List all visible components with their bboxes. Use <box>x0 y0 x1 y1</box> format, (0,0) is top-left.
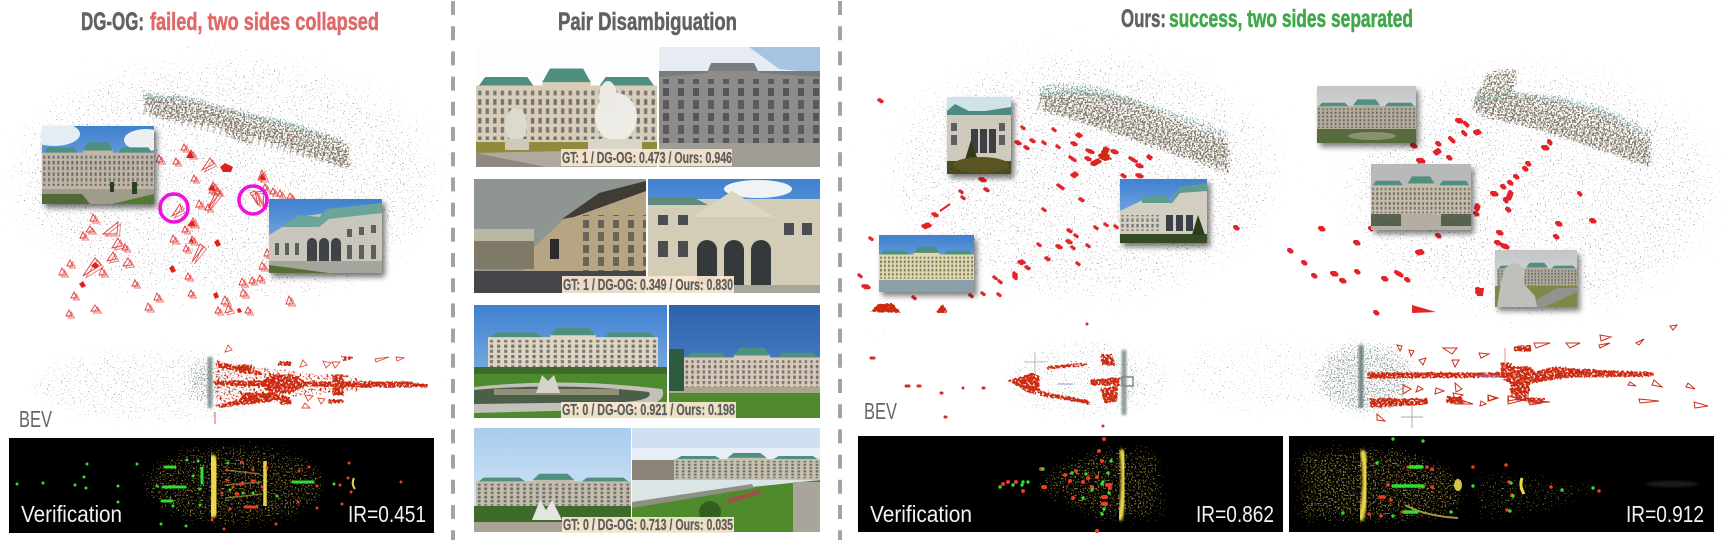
panel: verification map DG-OG <box>9 438 434 533</box>
image pair row 1: GT: 1 / DG-OG: 0.473 / Ours: 0.946 <box>562 150 732 167</box>
bird's eye view: DG-OG <box>25 343 428 427</box>
camera poses: red frusta <box>59 144 296 318</box>
panel: Ours successful reconstruction <box>858 5 1724 532</box>
photo: palace side with blue sky <box>1120 179 1210 247</box>
bird's eye view: second result <box>1170 325 1708 428</box>
panel: verification map second result: IR=0.912 <box>1626 501 1704 527</box>
photo: palace reflected in water <box>879 235 977 296</box>
image pair row 3: GT: 0 / DG-OG: 0.921 / Ours: 0.198 <box>562 402 735 419</box>
image pair row 2: GT: 1 / DG-OG: 0.349 / Ours: 0.830 <box>563 277 733 294</box>
image pair row 4 <box>474 428 820 534</box>
highlight: magenta circle on camera <box>239 186 267 214</box>
panel: verification map first result: IR=0.862 <box>1196 501 1274 527</box>
point cloud: first result palace <box>1037 82 1232 178</box>
bird's eye view: first result <box>871 324 1178 426</box>
image pair row 3 <box>474 305 820 419</box>
image pair row 1 <box>476 47 820 167</box>
point cloud: second result background <box>1330 55 1724 325</box>
label: BEV: BEV <box>19 406 52 432</box>
point cloud: palace facade collapsed <box>140 88 352 172</box>
panel: verification map DG-OG: Verification <box>21 501 122 527</box>
point cloud: sparse background <box>0 45 450 315</box>
label: BEV: BEV <box>864 398 897 424</box>
photo: palace gardens overcast <box>1317 86 1419 147</box>
panel: verification map first result: Verification <box>870 501 972 527</box>
point cloud: first result background <box>880 40 1290 310</box>
panel: pair disambiguation <box>474 8 820 534</box>
photo: garden pavilion with hedges <box>947 97 1014 178</box>
camera poses: second result <box>1235 120 1594 314</box>
photo: sphinx statue in front of palace <box>1495 250 1580 311</box>
panel: DG-OG failed reconstruction <box>0 8 450 533</box>
panel: verification map second result <box>1289 436 1714 532</box>
heading: DG-OG failed: failed, two sides collapsed <box>150 8 379 36</box>
image pair row 2 <box>474 179 820 294</box>
heading: Ours success: Ours: <box>1121 5 1166 33</box>
heading: DG-OG failed <box>81 8 379 36</box>
photo: palace front <box>28 122 168 208</box>
point cloud: second result palace <box>1472 66 1654 170</box>
image pair row 4: GT: 0 / DG-OG: 0.713 / Ours: 0.035 <box>563 517 733 534</box>
heading: Ours success <box>1121 5 1413 33</box>
highlight: magenta circle on camera <box>160 194 188 222</box>
heading: DG-OG failed: DG-OG: <box>81 8 144 36</box>
photo: palace side pavilion <box>269 199 385 277</box>
divider: left and centre panels <box>451 1 455 540</box>
heading: Ours success: success, two sides separated <box>1169 5 1413 33</box>
divider: centre and right panels <box>838 1 842 540</box>
panel: verification map first result <box>858 436 1283 532</box>
camera poses: first result <box>859 100 1238 313</box>
photo: palace with pavement <box>1371 164 1474 234</box>
heading: pair disambiguation: Pair Disambiguation <box>558 8 737 36</box>
panel: verification map DG-OG: IR=0.451 <box>348 501 426 527</box>
